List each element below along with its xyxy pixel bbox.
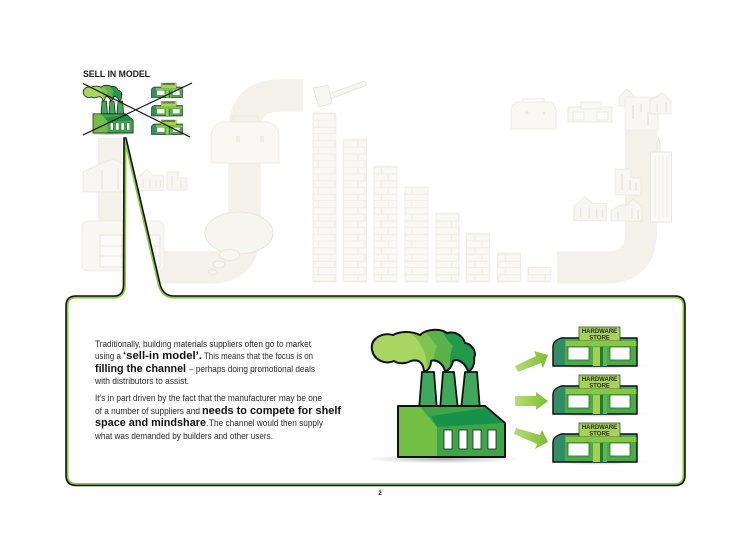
body text: The channel would then supply bbox=[209, 418, 324, 428]
callout panel bbox=[66, 138, 685, 486]
background pipe: centre bbox=[128, 96, 303, 268]
title: SELL IN MODEL bbox=[83, 69, 150, 79]
hardware store, bottom bbox=[546, 423, 646, 465]
body text: with distributors to assist. bbox=[94, 376, 189, 386]
faded skyscraper bbox=[650, 138, 672, 222]
hardware store, middle bbox=[546, 375, 646, 417]
body text: using a bbox=[95, 351, 121, 361]
hardware store, bottom: STORE bbox=[589, 432, 610, 438]
thumbnail factory bbox=[79, 83, 139, 135]
hardware store, middle: STORE bbox=[589, 384, 610, 390]
faded toolbox, right bbox=[511, 99, 556, 129]
background pipe: right bbox=[557, 125, 641, 268]
body text: of a number of suppliers and bbox=[95, 406, 200, 416]
body text: what was demanded by builders and other users. bbox=[94, 431, 273, 441]
faded hardware store bbox=[568, 102, 612, 122]
body text: Traditionally, building materials suppliers often go to market bbox=[95, 339, 312, 349]
thumbnail stores bbox=[149, 83, 186, 136]
arrow: to middle store bbox=[515, 392, 548, 410]
body text: – perhaps doing promotional deals bbox=[189, 364, 316, 374]
hardware store, top: HARDWARE bbox=[582, 329, 617, 335]
hardware store, top bbox=[546, 327, 646, 369]
faded houses, top right bbox=[619, 89, 671, 130]
hardware store, top: STORE bbox=[589, 336, 610, 342]
faded speech bubble bbox=[205, 212, 273, 274]
faded houses on the left bbox=[83, 159, 187, 192]
arrow: to top store bbox=[515, 351, 548, 372]
page number: 2 bbox=[378, 491, 382, 497]
faded toolbox bbox=[211, 116, 279, 163]
body text: ‘sell-in model’. bbox=[123, 350, 202, 362]
body text: This means that the focus is on bbox=[204, 351, 313, 361]
body text: It’s in part driven by the fact that the manufacturer may be one bbox=[95, 393, 322, 403]
faded hammer bbox=[313, 81, 367, 107]
hardware store, middle: HARDWARE bbox=[582, 377, 617, 383]
arrow: to bottom store bbox=[514, 428, 548, 449]
thumbnail stores: HARDWARE bbox=[162, 102, 176, 105]
crossed-out mark bbox=[83, 83, 192, 137]
body text: needs to compete for shelf bbox=[202, 405, 341, 417]
body text: space and mindshare bbox=[95, 417, 206, 429]
thumbnail stores: HARDWARE bbox=[162, 120, 176, 123]
background pipe: left vertical bbox=[98, 138, 122, 238]
hardware store, bottom: HARDWARE bbox=[582, 425, 617, 431]
faded brick columns bbox=[313, 113, 551, 282]
body text: . bbox=[206, 418, 208, 428]
faded panel with table bbox=[82, 221, 164, 271]
body text bbox=[94, 339, 341, 441]
faded houses, lower right bbox=[574, 169, 642, 221]
thumbnail stores: HARDWARE bbox=[162, 83, 176, 86]
body text: filling the channel bbox=[95, 363, 186, 375]
factory illustration bbox=[360, 325, 521, 464]
